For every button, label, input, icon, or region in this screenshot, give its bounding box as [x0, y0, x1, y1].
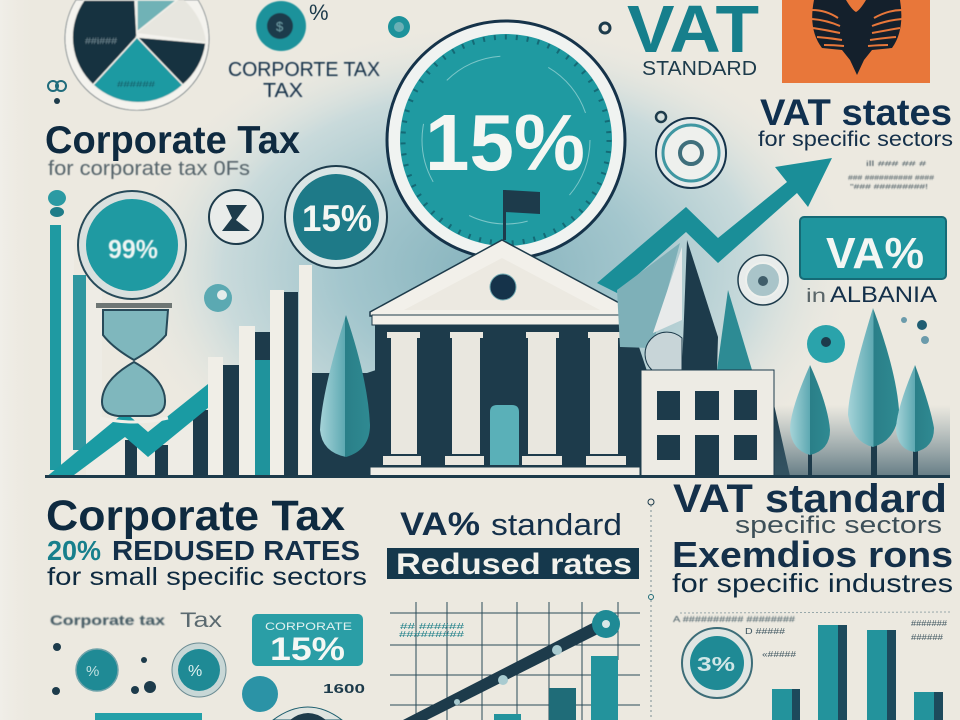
VA% standard heading — [400, 506, 622, 542]
subheading: standard: STANDARD — [642, 58, 757, 80]
icon: dark bolt ring — [209, 190, 263, 244]
bars left — [50, 225, 312, 476]
number label: 1600 — [323, 681, 365, 696]
VA% standard heading: VA% — [400, 506, 480, 542]
small dot — [656, 112, 666, 122]
small mark right — [901, 317, 929, 344]
column 1 — [383, 332, 421, 465]
heading: VAT states: VAT states — [760, 92, 952, 133]
bottom-left text block — [46, 492, 367, 591]
percent coins row: % — [86, 663, 99, 680]
corporate 15% box — [252, 614, 363, 667]
pie chart — [65, 0, 209, 110]
right text block: for specific industres — [672, 568, 953, 598]
small heading: corporte tax: CORPORTE TAX — [228, 59, 380, 81]
label: in Albania: in — [806, 286, 826, 307]
teal bar stub — [95, 713, 202, 720]
right text block: specific sectors — [735, 512, 942, 539]
right ground shade — [773, 405, 950, 476]
small left marks — [48, 81, 66, 104]
right text block: VAT standard — [673, 477, 947, 521]
fine print right — [848, 161, 934, 191]
line chart with bars — [390, 602, 640, 720]
column 3 — [522, 332, 562, 465]
percent coins row — [52, 643, 278, 712]
fine print right: ### ########## #### — [848, 175, 934, 182]
dashed divider with beads — [648, 499, 654, 720]
big 15% dial — [387, 21, 625, 259]
central bank building — [370, 240, 640, 476]
spire group — [617, 240, 752, 370]
fine print right: "### #########! — [850, 184, 928, 191]
right chart: «##### — [762, 650, 797, 659]
right text block: Exemdios rons — [672, 534, 953, 575]
ground line — [45, 475, 950, 478]
right chart: A ########## ######## — [673, 615, 796, 624]
15% badge: 15% — [302, 198, 372, 239]
icon: grey ring — [738, 255, 788, 305]
subheading: for corporate tax: for corporate tax 0Fs — [48, 158, 250, 180]
trees right — [790, 308, 934, 476]
icon: blob — [204, 284, 232, 312]
small mark near VAT — [600, 23, 610, 33]
hourglass — [96, 303, 172, 422]
door — [490, 405, 519, 465]
pie chart: ##i### — [85, 36, 117, 46]
label: in Albania: ALBANIA — [830, 282, 937, 307]
bottom-left text block: for small specific sectors — [47, 563, 367, 591]
half gauge — [273, 707, 342, 720]
coin — [682, 628, 752, 698]
corporate 15% box: 15% — [270, 631, 345, 667]
VA% standard heading: standard — [491, 507, 622, 542]
column 4 — [586, 332, 626, 465]
99% coin: 99% — [108, 234, 158, 264]
icon: ring coin — [656, 118, 726, 188]
small heading: corporte tax: TAX — [263, 80, 303, 102]
percent coins row: % — [188, 663, 202, 680]
reduced rates banner: Redused rates — [396, 548, 632, 581]
right chart: D ##### — [745, 627, 786, 636]
line chart with bars: ######### — [399, 630, 465, 639]
corporate 15% box: CORPORATE — [265, 621, 352, 633]
percent label: % — [309, 0, 329, 25]
flag on roof — [503, 190, 540, 240]
dark skyline behind building — [312, 320, 790, 476]
icon: side drop marks — [48, 190, 66, 217]
icon: coin top — [256, 1, 306, 51]
right chart: ####### — [911, 619, 948, 628]
heading: corporate tax: Corporate Tax — [45, 119, 300, 162]
icon: small ring — [388, 16, 410, 38]
coin: 3% — [697, 654, 735, 676]
flag of Albania — [782, 0, 930, 83]
rising arrow left — [45, 384, 208, 478]
right chart: ###### — [911, 633, 944, 642]
pie chart: ###### — [117, 80, 156, 89]
office building — [641, 370, 774, 477]
fine print right: ill ### ## # — [866, 161, 926, 168]
big 15% dial: 15% — [425, 98, 585, 187]
right text block — [672, 477, 953, 598]
line chart with bars: ## ###### — [400, 622, 465, 631]
15% badge — [285, 166, 387, 268]
subheading: for specific sectors: for specific sectors — [758, 128, 953, 151]
rising arrow right — [597, 158, 832, 293]
blurred tax caption: Tax — [180, 609, 223, 632]
blurred tax caption — [50, 609, 223, 632]
bottom-left text block: REDUSED RATES — [112, 535, 360, 566]
VA% box: VA% — [826, 229, 924, 278]
icon: coin top: $ — [276, 19, 284, 34]
bottom-left text block: 20% — [47, 535, 101, 566]
column 2 — [445, 332, 484, 465]
right chart — [673, 612, 950, 720]
VA% box — [800, 217, 946, 279]
icon: teal dot — [807, 325, 845, 363]
bottom-left text block: Corporate Tax — [46, 492, 345, 540]
99% coin — [78, 191, 186, 299]
tree left — [320, 315, 370, 457]
blurred tax caption: Corporate tax — [50, 612, 165, 628]
small heading: corporte tax — [228, 59, 380, 102]
